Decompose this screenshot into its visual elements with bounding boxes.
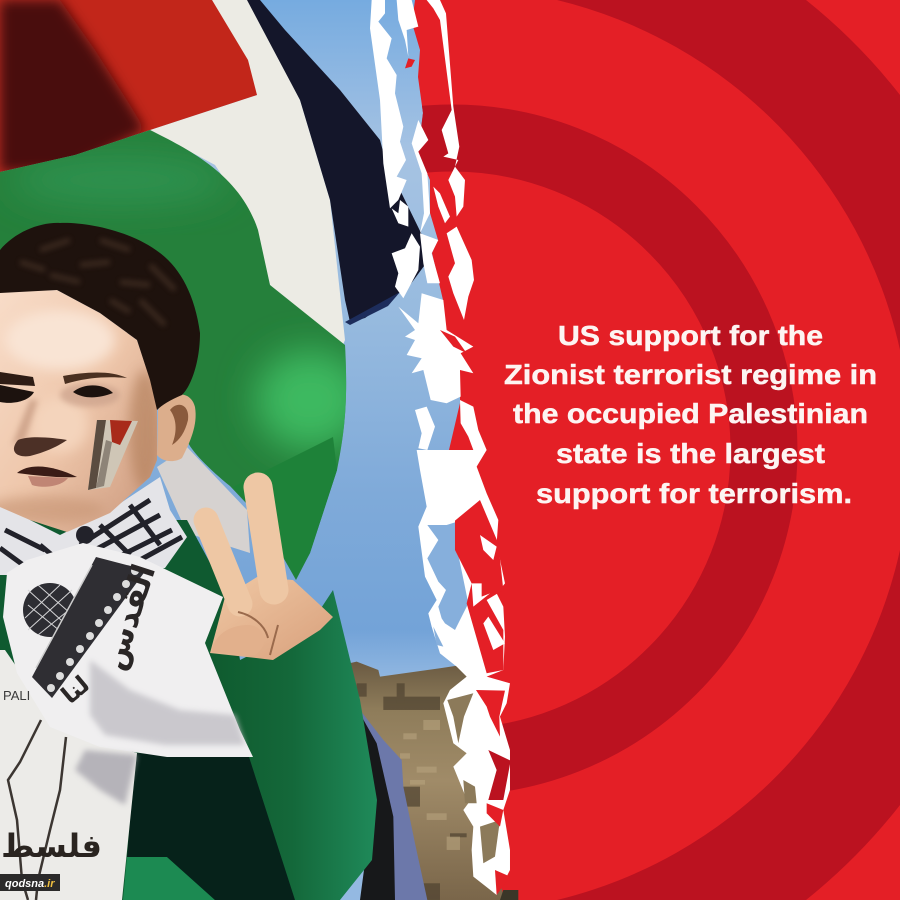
banner latin text: PALI [3,688,30,703]
right eye [73,385,113,397]
logo watermark: qodsna.ir [0,874,60,891]
flag green highlights [10,155,365,450]
cheek flag paint [88,420,138,490]
flag green lower fold [233,437,337,578]
flag black stripe [247,0,427,322]
flag red stripe [0,0,257,172]
main statement text: the occupied Palestinian [513,398,868,429]
keffiyeh scarf [0,477,187,575]
photo: stone wall [342,662,520,900]
nose side shadow [12,400,38,445]
upper white banner [3,543,253,757]
left eye [0,385,34,403]
flag white stripe [150,0,345,352]
flag red shadow [0,0,145,172]
lower banner shadow [75,750,137,805]
lower white banner [0,650,137,900]
dark red hole [488,750,511,800]
dark inside of shirt [127,753,300,900]
photo: Palestinian flag [0,0,427,580]
main statement text: support for terrorism. [536,478,852,509]
lower green shirt [123,857,215,900]
flag grey back patch [157,447,250,553]
banner shadow [90,660,245,745]
photo: sky background [0,0,540,900]
banner arabic: Filastin: فلسط [1,827,102,865]
main statement text: state is the largest [556,438,825,469]
nose shadow [14,437,67,456]
hair [0,223,200,410]
sleeve [207,590,377,900]
left eyebrow [0,372,35,386]
face [0,290,157,532]
map of Palestine [8,720,66,900]
torn paper edge: lower part [417,450,518,900]
red flecks on white [405,58,467,353]
dome icon [23,583,78,637]
main statement text [504,320,877,509]
sky hole [427,521,468,630]
banner arabic: Al-Quds: القدس [93,559,163,674]
torn paper edge: upper part [370,0,487,450]
mouth [17,466,77,487]
main statement text: US support for the [558,320,823,351]
photo: hanging cloth [360,710,427,900]
dark green clothes behind banners [0,520,290,900]
red hole [455,500,503,673]
dark corner block [500,890,518,900]
band of arches [32,557,146,698]
wall holes [447,693,473,743]
flag green stripe [0,130,346,580]
hair highlights [20,240,175,325]
right eyebrow [63,372,127,384]
logo watermark: qodsna.ir: qodsna.ir [5,878,55,890]
face shading [0,310,161,524]
red lower hole [476,690,505,737]
hand: peace sign [206,487,333,660]
ear [157,395,196,461]
white slivers in red [480,535,497,560]
photo: boy [0,223,377,900]
ear inner shadow [170,405,188,445]
main statement text: Zionist terrorist regime in [504,359,877,390]
panel: red background with concentric rings [414,0,900,900]
banner arabic: small mark: لنا [56,670,95,710]
flag blue fold [345,292,400,325]
